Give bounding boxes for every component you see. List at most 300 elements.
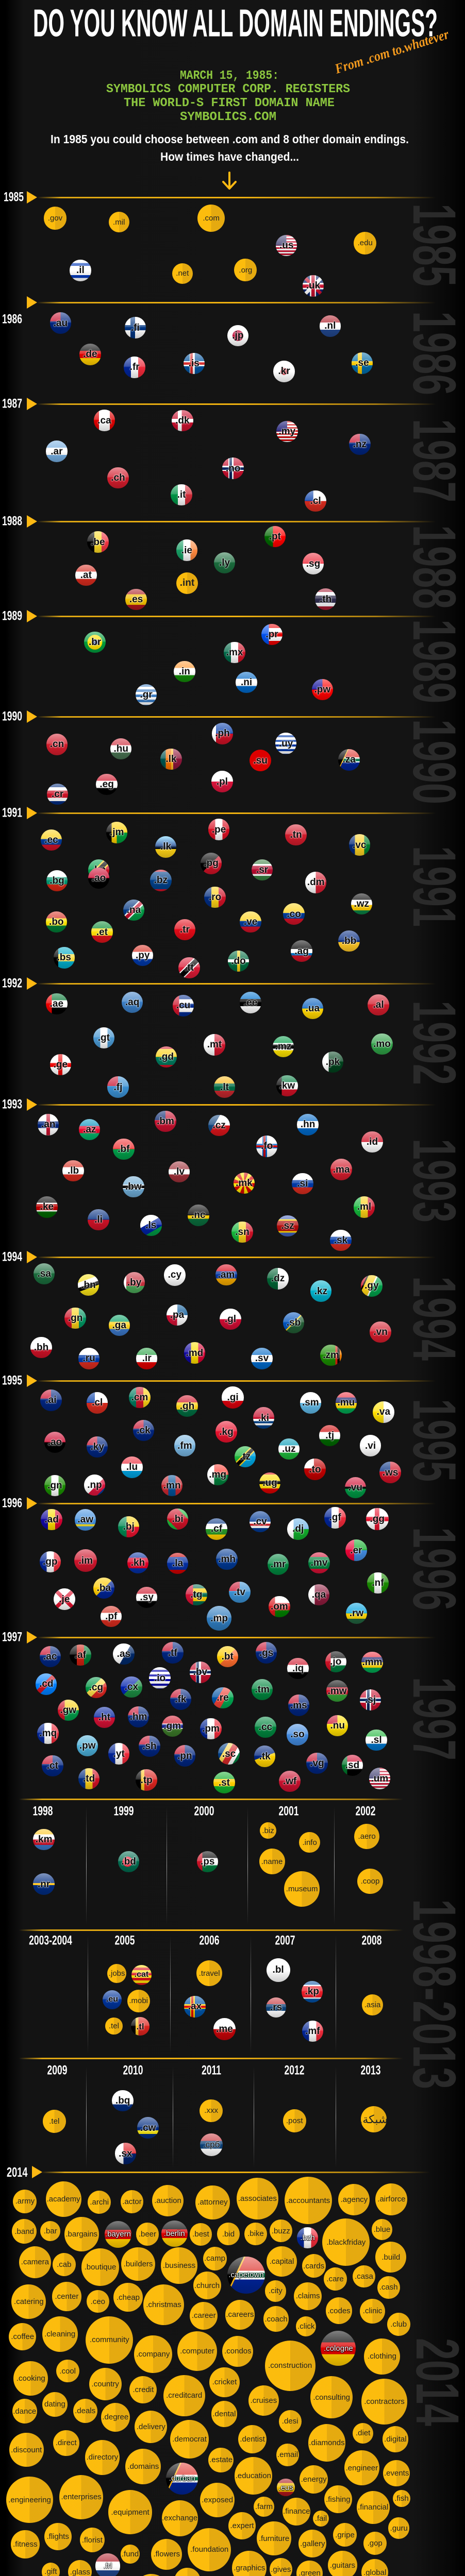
.democrat: .democrat: [172, 2435, 207, 2444]
.pr: [261, 624, 283, 645]
.bv: [190, 1662, 211, 1683]
.la: .la: [172, 1558, 183, 1569]
.gl: .gl: [225, 1314, 236, 1325]
.net: .net: [176, 269, 189, 278]
.mp: .mp: [210, 1613, 228, 1624]
.co: [283, 903, 305, 925]
page: 1997: [2, 1630, 22, 1645]
dating: dating: [44, 2400, 65, 2409]
.furniture: [257, 2521, 291, 2555]
.mh: [216, 1549, 238, 1570]
.gd: [156, 1046, 177, 1067]
.lu: .lu: [126, 1462, 138, 1472]
.to: [304, 1459, 326, 1480]
.bt: .bt: [222, 1651, 234, 1662]
.biz: .biz: [262, 1826, 274, 1835]
.guru: [388, 2517, 409, 2539]
.accountants: .accountants: [286, 2196, 330, 2205]
.fishing: .fishing: [326, 2495, 351, 2504]
.ni: [236, 672, 257, 693]
.va: .va: [377, 1406, 390, 1417]
page: 1993: [2, 1097, 22, 1112]
.fk: [170, 1689, 191, 1710]
.cab: [53, 2253, 76, 2276]
.delivery: .delivery: [137, 2422, 165, 2431]
.so: [287, 1724, 308, 1745]
.fail: [313, 2511, 329, 2527]
.sc: [218, 1743, 240, 1765]
page: 1985: [4, 190, 24, 204]
.aero: .aero: [358, 1832, 376, 1841]
.casa: [353, 2265, 375, 2287]
.cool: [56, 2360, 79, 2382]
big vertical years: [400, 204, 465, 2576]
.mr: [268, 1554, 289, 1575]
.eg: [96, 774, 118, 795]
.gn: [44, 1475, 65, 1496]
.yt: [108, 1743, 129, 1765]
.et: .et: [96, 927, 108, 938]
page: 1994: [2, 1250, 22, 1264]
.se: .se: [355, 358, 369, 368]
heading 2012: 2012: [285, 2063, 304, 2077]
.ua: .ua: [306, 1003, 320, 1014]
.global: [361, 2559, 388, 2576]
.so: .so: [290, 1729, 305, 1740]
.ct: [42, 1755, 63, 1776]
.bargains: [64, 2217, 99, 2251]
.directory: .directory: [87, 2453, 118, 2462]
.in: [174, 661, 195, 682]
heading 2005: 2005: [115, 1933, 135, 1947]
.mo: .mo: [373, 1039, 391, 1049]
.gp: [40, 1551, 61, 1572]
.ae: [46, 993, 68, 1014]
.org: .org: [239, 266, 252, 275]
.nl: [320, 315, 341, 337]
heading 1998: 1998: [33, 1804, 53, 1819]
.ar: .ar: [51, 446, 63, 457]
panel: 1990: [2, 709, 433, 805]
.equipment: .equipment: [111, 2508, 150, 2516]
.bid: [217, 2223, 240, 2245]
.hm: [128, 1706, 149, 1727]
.gm: [162, 1716, 183, 1737]
.kw: [276, 1075, 298, 1096]
.gn: .gn: [68, 1313, 82, 1324]
.us: .us: [279, 240, 293, 251]
.fund: .fund: [122, 2550, 139, 2558]
.frl: .frl: [103, 2562, 112, 2570]
.iq: [287, 1658, 309, 1679]
.pe: [208, 819, 229, 840]
.rs: .rs: [270, 2002, 282, 2013]
.ax: [184, 1996, 206, 2018]
.ws: [379, 1462, 401, 1483]
.directory: [85, 2440, 120, 2475]
.sy: .sy: [140, 1592, 154, 1603]
.gw: .gw: [60, 1705, 76, 1716]
.py: .py: [136, 950, 150, 961]
heading 1999: 1999: [114, 1804, 134, 1819]
.cf: .cf: [211, 1523, 222, 1534]
.ua: [302, 998, 323, 1019]
.casa: .casa: [355, 2272, 373, 2281]
.gw: [58, 1700, 79, 1721]
.sj: .sj: [365, 1694, 376, 1705]
page: 1991: [2, 806, 22, 820]
.bl: [267, 1958, 290, 1982]
.tj: [319, 1425, 340, 1446]
.ki: .ki: [258, 1413, 269, 1423]
panel: 1992: [2, 976, 433, 1098]
.mu: .mu: [337, 1397, 355, 1408]
.degree: [101, 2403, 130, 2432]
.gov: [44, 207, 67, 230]
.farm: [254, 2497, 274, 2517]
.gift: .gift: [44, 2567, 57, 2576]
.holdings: [134, 2574, 169, 2576]
page: 1995: [2, 1374, 22, 1388]
.mm: .mm: [362, 1657, 383, 1668]
panel: 1986: [2, 296, 433, 382]
.dm: [305, 872, 326, 893]
.cx: .cx: [125, 1682, 138, 1692]
.pg: .pg: [204, 858, 219, 869]
.fish: .fish: [394, 2494, 409, 2503]
.eus: .eus: [278, 2483, 293, 2492]
.academy: [46, 2181, 81, 2217]
.cheap: [113, 2283, 143, 2312]
.my: [276, 421, 298, 442]
.lc: .lk: [160, 841, 171, 852]
.frl: [95, 2553, 120, 2576]
.jo: [325, 1651, 346, 1672]
.clinic: [360, 2299, 385, 2324]
green intro text: MARCH 15, 1985:: [180, 69, 279, 83]
.tp: .tp: [141, 1775, 153, 1786]
.florist: [80, 2528, 105, 2552]
.mx: [224, 642, 245, 663]
.aq: [122, 992, 143, 1013]
.dz: .dz: [271, 1273, 285, 1284]
.tv: .tv: [234, 1587, 245, 1598]
.digital: [383, 2426, 408, 2452]
.equipment: [108, 2490, 152, 2534]
.boutique: .boutique: [85, 2263, 116, 2272]
.ec: .ec: [44, 835, 58, 845]
.dk: [172, 410, 193, 431]
.rw: .rw: [350, 1608, 363, 1619]
.nr: [33, 1873, 55, 1895]
.academy: .academy: [47, 2195, 80, 2204]
.kg: .kg: [219, 1427, 234, 1437]
.mr: .mr: [271, 1559, 286, 1570]
.no: .no: [226, 463, 240, 474]
.re: [212, 1687, 234, 1708]
.mv: [308, 1552, 330, 1573]
.sx: [115, 2143, 136, 2164]
heading 2000: 2000: [194, 1804, 214, 1819]
.ba: [93, 1578, 114, 1599]
.int: [176, 572, 198, 594]
.co: .co: [287, 909, 301, 920]
.br: [84, 632, 106, 653]
.tz: [235, 1446, 256, 1467]
.events: .events: [384, 2469, 409, 2478]
.sj: [360, 1689, 381, 1710]
.bl: .bl: [273, 1964, 284, 1975]
.md: [184, 1342, 205, 1364]
.creditcard: [163, 2375, 205, 2416]
.ge: [50, 1054, 71, 1075]
.florist: .florist: [82, 2536, 103, 2545]
.aq: .aq: [125, 997, 139, 1008]
.lb: .lb: [68, 1165, 79, 1176]
.ve: [240, 911, 261, 933]
.th: .th: [320, 594, 331, 605]
panel: 1997: [2, 1630, 433, 1793]
.gop: .gop: [368, 2539, 383, 2548]
.events: [383, 2460, 410, 2486]
.company: [134, 2335, 172, 2373]
.camp: .camp: [204, 2254, 225, 2263]
.farm: .farm: [255, 2502, 273, 2511]
.ceo: [87, 2290, 109, 2313]
.is: .is: [189, 358, 200, 369]
.travel: [196, 1960, 222, 1986]
.gf: [324, 1507, 346, 1529]
.np: .np: [87, 1480, 102, 1490]
.cf: [206, 1518, 227, 1540]
.hn: .hn: [301, 1119, 315, 1130]
heading 2011: 2011: [202, 2063, 221, 2077]
.tz: .tz: [240, 1451, 251, 1462]
.bo: .bo: [49, 917, 64, 927]
.bzh: .bzh: [300, 2233, 315, 2242]
.km: .km: [36, 1834, 53, 1845]
.mn: .mn: [163, 1480, 181, 1491]
.mu: [336, 1392, 357, 1414]
.beer: .beer: [139, 2230, 156, 2239]
2014 bubbles: .academy to .guitars: [6, 2177, 410, 2576]
.eu: [103, 1990, 122, 2009]
.cm: .cm: [131, 1392, 148, 1403]
.gs: .gs: [259, 1648, 273, 1658]
.us: [276, 235, 297, 256]
.sv: [251, 1348, 273, 1369]
.sz: [277, 1215, 298, 1236]
.club: [387, 2313, 410, 2336]
.durban: .durban: [169, 2474, 195, 2483]
.vi: .vi: [365, 1440, 376, 1451]
how times have changed: How times have changed...: [160, 150, 299, 163]
.io: [149, 1667, 171, 1689]
.ma: .ma: [333, 1164, 350, 1175]
.career: [190, 2302, 218, 2330]
.ml: .ml: [357, 1201, 371, 1212]
.computer: [177, 2331, 217, 2371]
.email: [276, 2444, 299, 2466]
.bq: [112, 2090, 134, 2111]
.careers: .careers: [226, 2310, 254, 2319]
.ga: [109, 1315, 130, 1336]
panel: 1988: [2, 514, 433, 610]
.ee: [240, 992, 261, 1013]
.blackfriday: [322, 2218, 370, 2266]
.tm: .tm: [255, 1684, 270, 1695]
panel: 1991: [2, 806, 433, 978]
panel: 1995: [2, 1374, 433, 1498]
.bf: .bf: [118, 1144, 130, 1155]
.uk: [303, 275, 324, 297]
.archi: [88, 2191, 111, 2214]
.kh: [127, 1552, 148, 1573]
.green: [296, 2561, 323, 2576]
.lt: .lt: [220, 1082, 229, 1093]
.berlin: [161, 2221, 188, 2246]
.gy: [361, 1275, 383, 1297]
.click: [296, 2316, 316, 2336]
.eus: [277, 2479, 295, 2496]
.democrat: [170, 2420, 209, 2459]
.mf: .mf: [305, 2026, 320, 2037]
.me: [213, 2018, 236, 2040]
.ni: .ni: [241, 677, 252, 688]
.tr: .tr: [180, 924, 190, 935]
.jp: .jp: [232, 330, 243, 341]
.pa: .pa: [170, 1310, 184, 1320]
.es: [125, 589, 147, 610]
.info: [299, 1832, 320, 1853]
.pk: [322, 1052, 343, 1073]
.tn: [285, 824, 307, 845]
.mt: [204, 1034, 225, 1056]
.gallery: [298, 2530, 326, 2557]
.sn: [231, 1222, 253, 1243]
.me: .me: [216, 2024, 233, 2035]
.fk: .fk: [175, 1694, 186, 1705]
.cn: [46, 734, 68, 755]
.expert: [228, 2512, 256, 2539]
.mq: .mq: [39, 1728, 57, 1739]
panel: 1998-2002 row: [20, 1799, 401, 1921]
.lv: [169, 1161, 190, 1182]
.bi: [167, 1509, 188, 1530]
.pa: [167, 1304, 188, 1326]
.diamonds: [308, 2424, 345, 2462]
.aw: [75, 1509, 96, 1531]
.sa: .sa: [37, 1268, 51, 1279]
.py: [132, 945, 153, 966]
.mn: [161, 1475, 182, 1496]
.engineer: [344, 2450, 379, 2485]
.il: [70, 260, 91, 281]
.deals: [73, 2399, 97, 2423]
.ms: .ms: [290, 1700, 307, 1711]
.nr: .nr: [38, 1879, 50, 1890]
.enterprises: .enterprises: [61, 2493, 102, 2501]
.ao: [88, 868, 109, 889]
.sm: .sm: [302, 1397, 319, 1408]
.diet: [353, 2423, 373, 2444]
.sy: [136, 1587, 157, 1608]
.construction: .construction: [268, 2361, 312, 2370]
.band: [12, 2219, 37, 2244]
.name: [259, 1849, 285, 1874]
.business: [161, 2247, 197, 2284]
.cv: .cv: [253, 1516, 267, 1527]
.cx: [121, 1676, 142, 1698]
.pn: [174, 1745, 195, 1767]
.fm: [174, 1435, 195, 1456]
.flights: .flights: [46, 2532, 69, 2541]
.gi: [222, 1386, 244, 1409]
.su: .su: [253, 755, 268, 766]
.bh: .bh: [34, 1342, 48, 1353]
.berlin: .berlin: [164, 2229, 185, 2238]
.dj: .dj: [292, 1523, 304, 1534]
.cg: [86, 1677, 107, 1698]
.st: [213, 1772, 235, 1793]
.nu: [327, 1715, 348, 1736]
.careers: [225, 2300, 255, 2330]
.gallery: .gallery: [300, 2539, 325, 2548]
.ch: .ch: [111, 472, 125, 483]
.mf: [302, 2021, 323, 2042]
.army: .army: [15, 2197, 35, 2206]
.ee: .ee: [244, 997, 257, 1008]
page: 1989: [2, 609, 22, 623]
.et: [91, 921, 113, 943]
.domains: .domains: [127, 2462, 159, 2471]
.consulting: .consulting: [313, 2393, 350, 2402]
.xxx: [200, 2099, 223, 2122]
.sd: .sd: [345, 1760, 359, 1771]
.jm: [106, 822, 127, 843]
.post: [283, 2109, 306, 2132]
.gives: [270, 2558, 292, 2576]
.actor: .actor: [122, 2197, 142, 2206]
.tp: [136, 1769, 157, 1791]
.mz: .mz: [275, 1041, 291, 1052]
.ao: .ao: [92, 873, 106, 884]
.vn: .vn: [373, 1327, 388, 1337]
.pw: [77, 1735, 98, 1756]
.pl: .pl: [217, 776, 228, 787]
.ve: .ve: [244, 917, 257, 927]
.ht: .ht: [98, 1712, 110, 1723]
.gg: [366, 1508, 389, 1530]
.sk: .sk: [334, 1235, 347, 1246]
.sr: [252, 859, 273, 880]
page: 1988: [2, 514, 22, 529]
.cr: [47, 784, 68, 805]
.uz: .uz: [282, 1444, 296, 1454]
.ph: .ph: [215, 728, 230, 739]
.cy: .cy: [168, 1269, 181, 1280]
.engineering: .engineering: [8, 2496, 51, 2504]
.archi: .archi: [90, 2198, 109, 2207]
.direct: [53, 2430, 79, 2456]
.ke: .ke: [40, 1201, 54, 1212]
.my: .my: [278, 426, 295, 437]
.bz: [150, 870, 172, 891]
.airforce: [375, 2183, 407, 2215]
.attorney: [195, 2185, 230, 2219]
.aw: .aw: [77, 1514, 93, 1525]
.furniture: .furniture: [259, 2534, 289, 2543]
